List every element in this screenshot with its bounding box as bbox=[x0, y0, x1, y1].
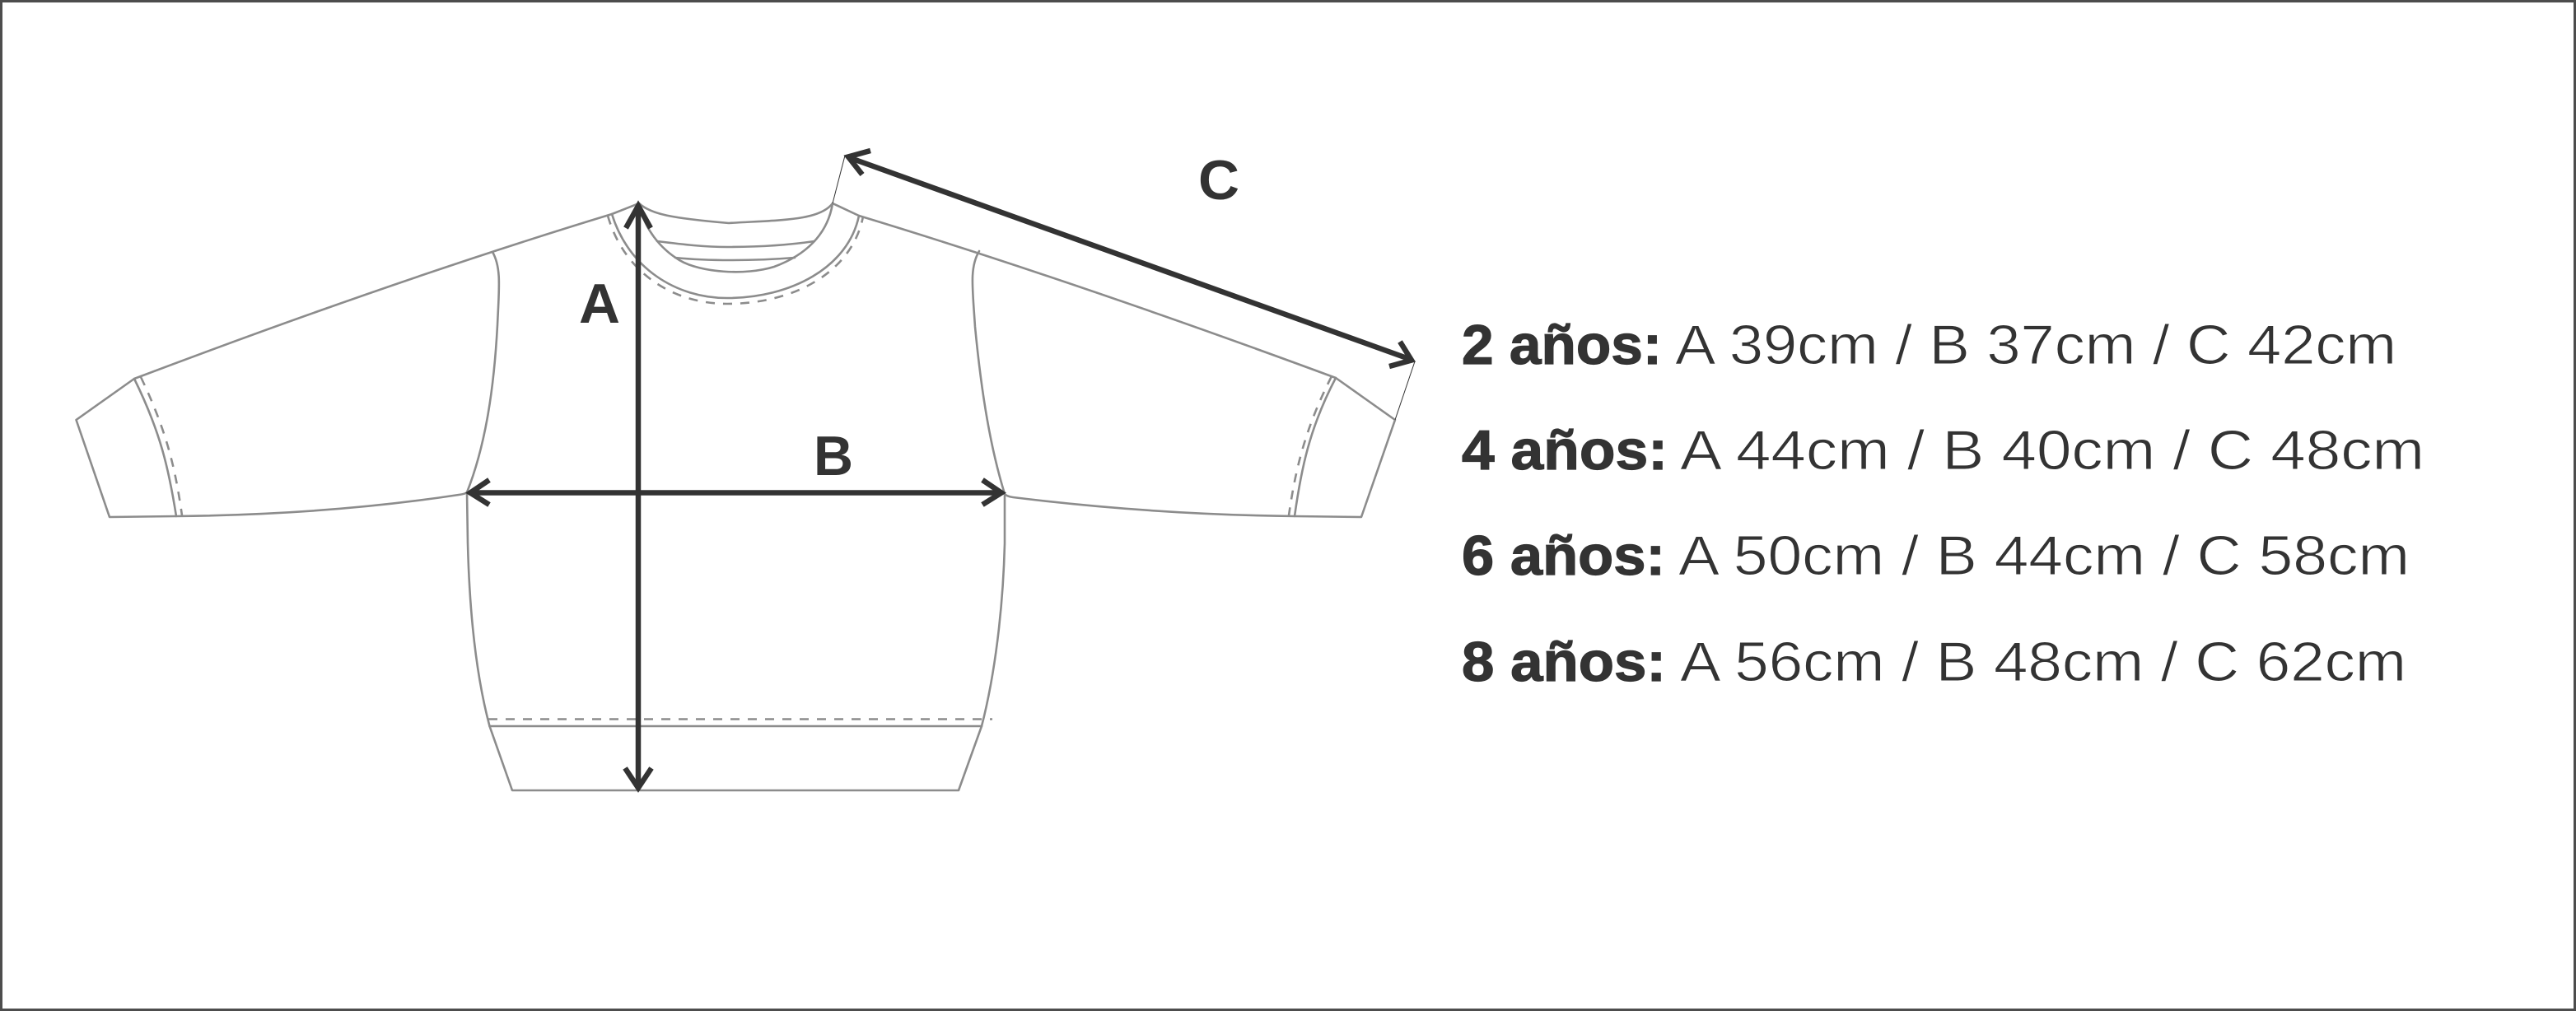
collar bbox=[608, 203, 863, 304]
arrow C bbox=[848, 151, 1412, 366]
size row: 2 años: 2 años: bbox=[1462, 314, 1662, 376]
left sleeve bbox=[76, 203, 639, 517]
thin guide lines for measurement C bbox=[833, 156, 1415, 420]
arrow A bbox=[625, 206, 651, 788]
label B: B bbox=[814, 425, 853, 487]
body bbox=[467, 251, 1005, 790]
arrow B bbox=[470, 480, 1001, 505]
size row: 8 años: A 56cm / B 48cm / C 62cm bbox=[1680, 631, 2406, 693]
sweatshirt line drawing bbox=[76, 156, 1415, 790]
size row: 6 años: A 50cm / B 44cm / C 58cm bbox=[1678, 524, 2410, 587]
size list bbox=[1462, 314, 2424, 693]
size row: 6 años bbox=[1462, 524, 2410, 587]
right sleeve bbox=[833, 203, 1395, 517]
size row: 4 años: 4 años: bbox=[1462, 419, 1668, 482]
size row: 6 años: 6 años: bbox=[1462, 524, 1665, 587]
size row: 8 años: 8 años: bbox=[1462, 631, 1666, 693]
size row: 4 años bbox=[1462, 419, 2424, 482]
size row: 2 años: A 39cm / B 37cm / C 42cm bbox=[1675, 314, 2396, 376]
label C: C bbox=[1198, 149, 1239, 212]
size row: 4 años: A 44cm / B 40cm / C 48cm bbox=[1680, 419, 2424, 482]
label A: A bbox=[579, 273, 620, 335]
